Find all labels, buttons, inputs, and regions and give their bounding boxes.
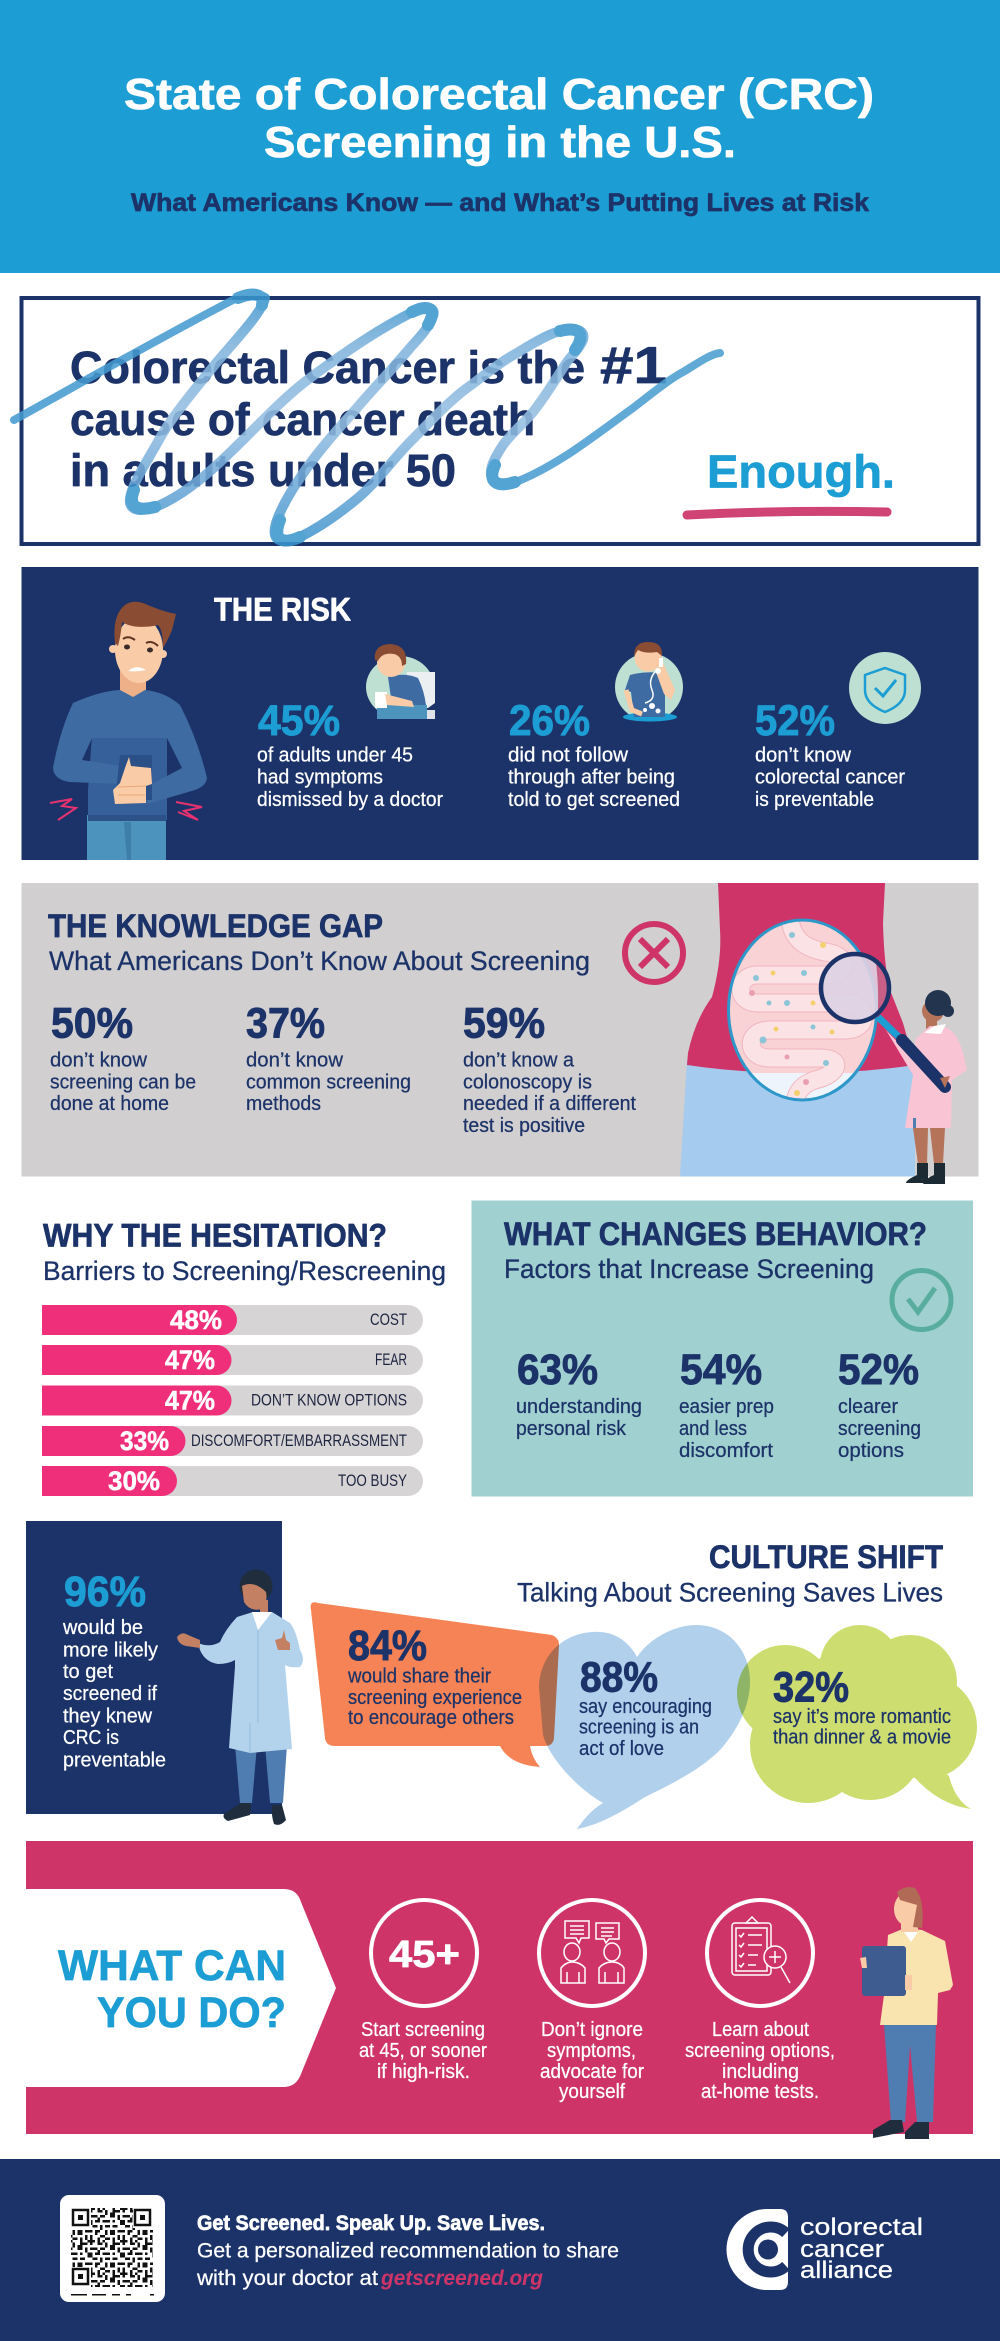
illustration: torso with magnifier bbox=[680, 883, 967, 1184]
navy card: 96%: they knew bbox=[63, 1706, 153, 1728]
action: advocate: yourself bbox=[559, 2081, 625, 2103]
illustration: man with stomach pain bbox=[50, 602, 207, 860]
action: start at 45: 45+ bbox=[389, 1934, 460, 1976]
bar: too busy 30%: TOO BUSY bbox=[338, 1471, 407, 1490]
stat: 52%: colorectal cancer bbox=[755, 766, 905, 788]
navy card: 96%: 96% bbox=[64, 1568, 146, 1616]
stat text: 84%: to encourage others bbox=[348, 1707, 514, 1729]
stat: 63% bbox=[516, 1346, 642, 1440]
stat: 54%: and less bbox=[679, 1418, 747, 1440]
stat: 63%: 63% bbox=[517, 1346, 598, 1394]
navy card: 96%: CRC is bbox=[63, 1727, 119, 1749]
statement text bbox=[70, 337, 667, 496]
action: learn: Learn about bbox=[712, 2019, 809, 2041]
panel: what changes behavior bbox=[472, 1200, 973, 1496]
stat: 45%: 45% bbox=[258, 697, 340, 745]
speech bubble: 88% bbox=[539, 1625, 750, 1829]
stat: 26% bbox=[508, 697, 680, 811]
arrow banner bbox=[26, 1889, 336, 2087]
stat: 54%: easier prep bbox=[679, 1396, 774, 1418]
footer band bbox=[0, 2159, 1000, 2341]
stat: 59%: don’t know a bbox=[463, 1050, 575, 1072]
subheading: What Americans Don’t Know About Screening bbox=[49, 946, 590, 976]
stat: 59%: needed if a different bbox=[463, 1093, 636, 1115]
stat: 54%: 54% bbox=[680, 1346, 762, 1394]
action: start at 45: Start screening bbox=[361, 2019, 485, 2041]
bar: too busy 30%: 30% bbox=[108, 1466, 160, 1496]
stat text: 88%: 88% bbox=[580, 1654, 658, 1702]
action: learn bbox=[685, 1900, 835, 2103]
statement text: Colorectal Cancer is the bbox=[70, 342, 585, 393]
bar: fear 47%: FEAR bbox=[375, 1350, 407, 1369]
logo: colorectal cancer alliance: cancer bbox=[800, 2236, 884, 2263]
panel: what can you do bbox=[26, 1841, 973, 2139]
stat text: 32%: 32% bbox=[773, 1664, 849, 1712]
panel: why the hesitation bbox=[42, 1218, 446, 1496]
banner heading bbox=[58, 1942, 286, 2037]
speech bubble: 32% bbox=[737, 1625, 977, 1809]
bar chart bbox=[42, 1305, 423, 1496]
bar: cost 48%: 48% bbox=[170, 1305, 222, 1335]
stat: 59%: 59% bbox=[463, 1000, 545, 1048]
bar: cost 48%: COST bbox=[370, 1310, 407, 1329]
stat: 52%: screening bbox=[838, 1418, 921, 1440]
icon: clipboard with magnifier bbox=[732, 1917, 790, 1983]
title: Screening in the U.S. bbox=[264, 118, 736, 167]
icon: shield with check bbox=[849, 652, 921, 724]
statement text: cause of cancer death bbox=[70, 394, 535, 445]
stat: 52% bbox=[838, 1346, 921, 1462]
navy card: 96%: more likely bbox=[63, 1640, 158, 1662]
heading: CULTURE SHIFT bbox=[709, 1539, 943, 1575]
stat: 63%: understanding bbox=[516, 1396, 642, 1418]
stat: 50%: screening can be bbox=[50, 1072, 196, 1094]
stat: 26%: 26% bbox=[509, 697, 590, 745]
title: State of Colorectal Cancer (CRC) bbox=[124, 70, 874, 119]
logo: colorectal cancer alliance: colorectal bbox=[800, 2214, 923, 2241]
QR code bbox=[60, 2195, 165, 2302]
enough call-out: Enough. bbox=[707, 446, 895, 498]
heading: THE KNOWLEDGE GAP bbox=[48, 908, 383, 944]
illustration: woman with clipboard bbox=[860, 1887, 953, 2139]
bar: fear 47%: 47% bbox=[165, 1345, 215, 1375]
call to action text: with your doctor at bbox=[196, 2267, 378, 2290]
stat text: 84%: screening experience bbox=[348, 1687, 522, 1709]
stat: 26%: through after being bbox=[508, 766, 675, 788]
bar: too busy 30% bbox=[42, 1466, 423, 1496]
icon: person on the phone bbox=[615, 642, 683, 722]
stat: 45%: of adults under 45 bbox=[257, 744, 413, 766]
stat: 54% bbox=[679, 1346, 774, 1462]
panel: the risk bbox=[22, 567, 978, 860]
stat: 52%: don’t know bbox=[755, 744, 852, 766]
action: advocate bbox=[539, 1900, 645, 2103]
icon: two people talking bbox=[561, 1921, 624, 1983]
stat: 45%: had symptoms bbox=[257, 766, 383, 788]
logo: colorectal cancer alliance bbox=[727, 2209, 923, 2290]
stat text: 88% bbox=[579, 1654, 712, 1760]
icon: check in circle bbox=[892, 1270, 951, 1330]
action: advocate: Don’t ignore bbox=[541, 2019, 643, 2041]
navy card: 96%: preventable bbox=[63, 1750, 166, 1772]
title bbox=[124, 70, 874, 167]
call to action text: Get Screened. Speak Up. Save Lives. bbox=[197, 2212, 545, 2235]
panel: #1 cause statement bbox=[14, 294, 978, 544]
navy card: 96%: would be bbox=[62, 1617, 143, 1639]
subheading: Barriers to Screening/Rescreening bbox=[43, 1256, 446, 1286]
panel: the knowledge gap bbox=[22, 883, 978, 1184]
heading: WHAT CHANGES BEHAVIOR? bbox=[504, 1216, 927, 1252]
stat: 45% bbox=[257, 697, 443, 811]
icon: person on toilet bbox=[366, 644, 435, 719]
stat: 37%: 37% bbox=[246, 1000, 325, 1048]
action: advocate: symptoms, bbox=[547, 2040, 636, 2062]
stat: 50%: done at home bbox=[50, 1093, 169, 1115]
stat: 59%: test is positive bbox=[463, 1115, 585, 1137]
enough call-out bbox=[687, 446, 895, 515]
bar: don't know options 47% bbox=[42, 1386, 423, 1416]
logo: colorectal cancer alliance: alliance bbox=[800, 2257, 893, 2284]
subheading: Factors that Increase Screening bbox=[504, 1254, 874, 1284]
stat: 50%: don’t know bbox=[50, 1050, 148, 1072]
bar: discomfort 33%: 33% bbox=[120, 1426, 169, 1456]
stat: 59%: colonoscopy is bbox=[463, 1072, 592, 1094]
navy card: 96%: screened if bbox=[63, 1683, 157, 1705]
stat: 52%: 52% bbox=[755, 697, 835, 745]
stat text: 32%: than dinner & a movie bbox=[773, 1726, 951, 1748]
stat text: 88%: screening is an bbox=[579, 1716, 699, 1738]
action: start at 45: at 45, or sooner bbox=[359, 2040, 487, 2062]
stat text: 88%: say encouraging bbox=[579, 1696, 712, 1718]
bar: discomfort 33% bbox=[42, 1426, 423, 1456]
stat text: 88%: act of love bbox=[579, 1738, 664, 1760]
bar: discomfort 33%: DISCOMFORT/EMBARRASSMENT bbox=[191, 1431, 407, 1450]
stat: 26%: told to get screened bbox=[508, 789, 680, 811]
stat: 37%: methods bbox=[246, 1093, 321, 1115]
speech bubble: 84% bbox=[311, 1602, 559, 1767]
stat: 37% bbox=[246, 1000, 411, 1115]
stat text: 32% bbox=[773, 1664, 951, 1748]
heading: WHY THE HESITATION? bbox=[43, 1218, 387, 1254]
statement text: #1 bbox=[600, 337, 667, 395]
stat: 50%: 50% bbox=[51, 1000, 133, 1048]
heading: THE RISK bbox=[214, 592, 351, 628]
stat: 52%: is preventable bbox=[755, 789, 874, 811]
stat text: 32%: say it’s more romantic bbox=[773, 1706, 951, 1728]
bar: don't know options 47%: 47% bbox=[165, 1386, 215, 1416]
bar: cost 48% bbox=[42, 1305, 423, 1335]
action: learn: screening options, bbox=[685, 2040, 835, 2062]
stat: 26%: did not follow bbox=[508, 744, 629, 766]
panel: culture shift bbox=[26, 1521, 977, 1829]
call to action text: Get a personalized recommendation to share bbox=[197, 2240, 619, 2262]
illustration: doctor in white coat bbox=[177, 1570, 303, 1825]
scribble stroke bbox=[14, 294, 720, 541]
navy card: 96% bbox=[26, 1521, 282, 1814]
call to action text bbox=[196, 2212, 619, 2290]
call to action text: getscreened.org bbox=[380, 2267, 543, 2290]
stat: 52%: clearer bbox=[838, 1396, 898, 1418]
doctor with magnifier bbox=[886, 990, 967, 1184]
stat text: 84% bbox=[347, 1622, 522, 1729]
stat: 59% bbox=[463, 1000, 636, 1137]
action: learn: including bbox=[722, 2061, 799, 2083]
action: start at 45: if high-risk. bbox=[377, 2061, 470, 2083]
stat text: 84%: 84% bbox=[348, 1622, 427, 1670]
stat: 37%: don’t know bbox=[246, 1050, 344, 1072]
stat: 45%: dismissed by a doctor bbox=[257, 789, 443, 811]
bar: don't know options 47%: DON’T KNOW OPTIONS bbox=[251, 1390, 407, 1410]
action: learn: at-home tests. bbox=[701, 2081, 819, 2103]
icon: x in circle bbox=[625, 924, 683, 982]
stat: 52% bbox=[755, 697, 905, 811]
bar: fear 47% bbox=[42, 1345, 423, 1375]
banner heading: YOU DO? bbox=[97, 1989, 286, 2037]
stat: 52%: 52% bbox=[838, 1346, 919, 1394]
action: advocate: advocate for bbox=[540, 2061, 644, 2083]
statement text: in adults under 50 bbox=[70, 445, 456, 496]
stat: 50% bbox=[50, 1000, 196, 1115]
header band bbox=[0, 0, 1000, 273]
stat: 52%: options bbox=[838, 1440, 904, 1462]
stat: 54%: discomfort bbox=[679, 1440, 773, 1462]
navy card: 96%: to get bbox=[63, 1661, 113, 1683]
subtitle: What Americans Know — and What’s Putting Lives at Risk bbox=[131, 189, 869, 217]
banner heading: WHAT CAN bbox=[58, 1942, 286, 1990]
stat: 37%: common screening bbox=[246, 1072, 411, 1094]
subheading: Talking About Screening Saves Lives bbox=[517, 1578, 943, 1608]
stat text: 84%: would share their bbox=[347, 1666, 491, 1688]
action: start at 45 bbox=[359, 1900, 487, 2083]
stat: 63%: personal risk bbox=[516, 1418, 627, 1440]
